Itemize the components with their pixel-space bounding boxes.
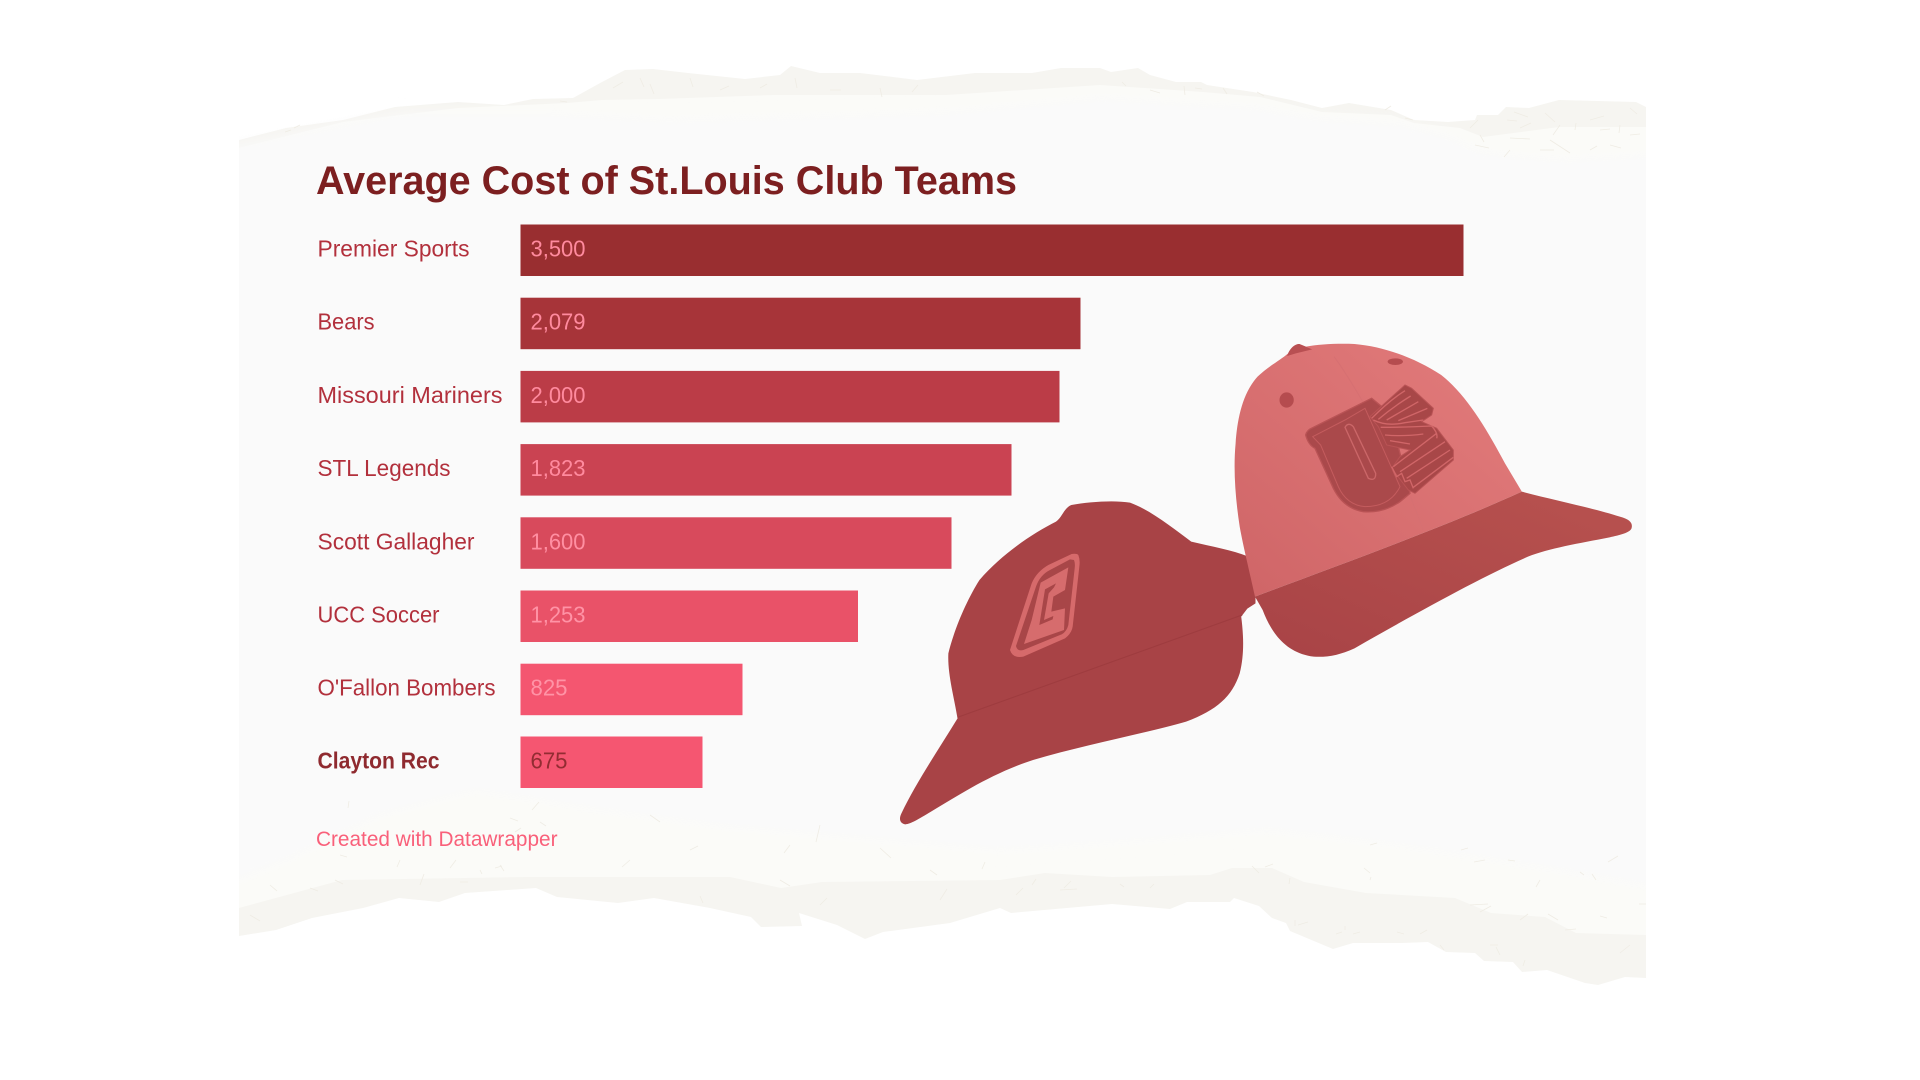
row: STL Legends: STL Legends — [318, 455, 450, 481]
row: Premier Sports — [318, 224, 1464, 276]
cap button — [1287, 344, 1312, 356]
paper: torn outer edge — [239, 66, 1646, 985]
row: Missouri Mariners: Missouri Mariners — [318, 382, 502, 408]
row: Scott Gallagher: 1,600 — [530, 528, 586, 554]
row: Bears: Bears — [318, 309, 374, 335]
row: Premier Sports: 3,500 — [530, 236, 586, 262]
paper: lighter inner layer — [239, 85, 1646, 935]
row: STL Legends: 1,823 — [530, 455, 586, 481]
cap seam — [958, 615, 1242, 717]
row: O'Fallon Bombers: 825 — [530, 675, 568, 701]
row: Missouri Mariners — [318, 371, 1060, 422]
row: Bears: 2,079 — [530, 309, 586, 335]
row: Clayton Rec — [318, 736, 702, 788]
torn paper background — [200, 66, 1700, 985]
row: UCC Soccer: 1,253 — [530, 602, 586, 628]
footer credit: Created with Datawrapper — [316, 827, 558, 851]
paper: main sheet — [200, 98, 1700, 895]
row: Missouri Mariners: 2,000 — [530, 382, 586, 408]
row: Clayton Rec: 675 — [530, 748, 568, 774]
right cap brim — [1255, 492, 1632, 657]
right cap crown — [1235, 344, 1522, 597]
icon: right cap — [1235, 344, 1632, 657]
title: Average Cost of St.Louis Club Teams — [316, 159, 1017, 203]
icon: baseball caps — [900, 344, 1632, 824]
icon: US logo on right cap — [1306, 385, 1453, 512]
row: UCC Soccer — [318, 590, 858, 642]
row: UCC Soccer: UCC Soccer — [318, 602, 440, 628]
row: Premier Sports: Premier Sports — [318, 236, 470, 262]
row: O'Fallon Bombers — [318, 664, 742, 715]
eyelets — [1279, 392, 1294, 408]
row: Bears — [318, 298, 1080, 349]
row: O'Fallon Bombers: O'Fallon Bombers — [318, 675, 496, 701]
bar chart — [318, 224, 1464, 788]
row: Scott Gallagher: Scott Gallagher — [318, 528, 475, 554]
cap panel seams — [1334, 357, 1423, 530]
icon: C logo on left cap — [1010, 554, 1080, 657]
row: STL Legends — [318, 444, 1012, 496]
row: Clayton Rec: Clayton Rec — [318, 748, 440, 774]
icon: left cap — [900, 501, 1256, 824]
row: Scott Gallagher — [318, 517, 952, 569]
paper fibres — [250, 78, 1646, 966]
